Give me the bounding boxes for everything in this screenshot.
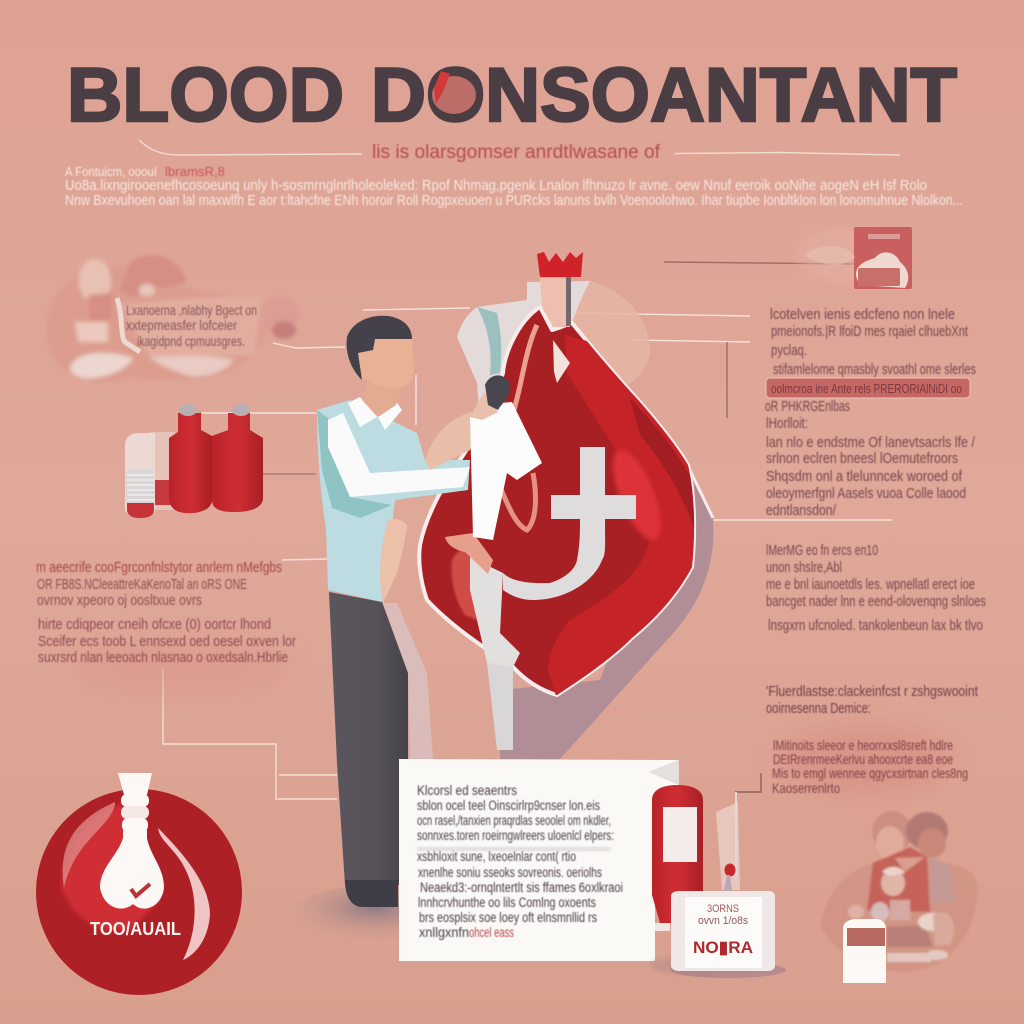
donation box: NO▮RA bbox=[693, 938, 753, 957]
title: BLOOD bbox=[67, 53, 344, 138]
badge: blood bottle circle: TOO/AUAIL bbox=[90, 919, 181, 939]
highlight bar bbox=[766, 378, 970, 398]
drop shadow bbox=[500, 462, 713, 759]
intro text bbox=[65, 164, 963, 209]
connector lines bbox=[163, 262, 892, 799]
illustration: man bbox=[317, 316, 490, 907]
paper note bbox=[399, 759, 679, 961]
man hair bbox=[347, 316, 412, 380]
icon: image card top right bbox=[797, 227, 912, 289]
text block: right upper: pyclaq. bbox=[771, 342, 807, 359]
text block: bottom right heading: 'Fluerdlastse:clackeinfcst r zshgswooint bbox=[766, 683, 979, 700]
text block: right middle: Shqsdm onl a tlelunncek woroed of bbox=[766, 468, 963, 485]
illustration: woman bbox=[380, 375, 542, 759]
woman skin bbox=[445, 533, 493, 574]
text block: left middle: hirte cdiqpeor cneih ofcxe (0) oortcr lhond bbox=[38, 616, 271, 633]
man face bbox=[358, 339, 414, 388]
text block: right middle: lHorlloit: bbox=[766, 415, 808, 432]
text block: bottom right body: Kaoserrenlrto bbox=[772, 780, 840, 796]
text block: right middle: lan nlo e endstme Of lanevtsacrls lfe / bbox=[766, 434, 976, 451]
man shoes bbox=[345, 880, 398, 907]
title bbox=[67, 53, 957, 138]
paper text: lnnhcrvhunthe oo lils Comlng oxoents bbox=[418, 895, 596, 910]
badge: blood bottle circle bbox=[36, 773, 242, 995]
text block: left middle: m aeecrife cooFgrconfnlstytor anrlern nMefgbs bbox=[36, 559, 282, 576]
man collar bbox=[348, 397, 402, 430]
text block: right middle: edntlansdon/ bbox=[766, 502, 837, 519]
text block: right middle bbox=[765, 398, 976, 519]
paper text: sblon ocel teel Oinscirlrp9cnser lon.eis bbox=[417, 798, 600, 813]
torso behind the drop bbox=[457, 281, 650, 425]
intro text: A Fontuicm, ooouI bbox=[65, 164, 157, 179]
text block: right middle: oleoymerfgnl Aasels vuoa Colle laood bbox=[766, 485, 966, 502]
text block: right upper: lcotelven ienis edcfeno non lnele bbox=[770, 306, 955, 323]
text block: bottom right body: lMitinoits sleeor e heorrxxsl8sreft hdlre bbox=[773, 737, 953, 753]
subtitle with rules bbox=[139, 140, 900, 163]
paper text: ohcel eass bbox=[469, 925, 514, 940]
text block: right lower: lMerMG eo fn ercs en10 bbox=[766, 542, 878, 559]
paper text: sonnxes.toren roeirngwlreers uloenlcl elpers: bbox=[417, 828, 614, 843]
highlight bar: oolmcroa ine Ante rels PRERORIAlNiDI oo bbox=[771, 381, 962, 396]
intro text: lbramsR,8 bbox=[165, 164, 225, 179]
text block: bottom right body: DEtRrenrmeeKerlvu ahooxcrte ea8 eoe bbox=[773, 751, 953, 767]
man torso bbox=[317, 400, 470, 602]
intro text: Uo8a.lixngirooenefhcosoeunq unly h-sosmrnglnrlholeoleked: Rpof Nhmag,pgenk Lnalon lfhnuzo lr avne. oew Nnuf eeroik ooNihe aogeN eH lsf Rolo bbox=[65, 177, 927, 194]
woman arm behind man bbox=[425, 412, 490, 470]
paper text: xnenlhe soniu sseoks sovreonis. oeriolhs bbox=[418, 865, 602, 880]
text block: left middle: ovrnov xpeoro oj oosltxue ovrs bbox=[37, 592, 202, 609]
woman legs bbox=[487, 663, 513, 750]
paper text: xsbhloxit sune, lxeoelnlar cont( rtio bbox=[417, 849, 576, 864]
text block: top left: Lxanoerna ,nlabhy Bgect on bbox=[126, 302, 257, 318]
icon: cross with curved tube bbox=[503, 447, 636, 600]
paper text: Klcorsl ed seaentrs bbox=[417, 783, 517, 798]
woman back leg bbox=[380, 519, 407, 603]
text block: left middle: Sceifer ecs toob L ennsexd oed oesel oxven lor bbox=[38, 633, 296, 650]
text block: bottom right body bbox=[772, 737, 968, 796]
subtitle with rules: lis is olarsgomser anrdtlwasane of bbox=[372, 142, 661, 163]
woman neck bbox=[470, 392, 498, 420]
donation box: 3ORNS bbox=[707, 903, 739, 915]
woman head bbox=[485, 375, 510, 410]
text block: top left: xxtepmeasfer lofceier bbox=[126, 317, 237, 333]
watercolor blob: left text bbox=[70, 642, 290, 694]
icon: blood bottles bbox=[125, 404, 263, 518]
woman dress bbox=[470, 402, 542, 540]
paper text: ocn rasel,/tanxien praqrdlas seoolel om nkdler, bbox=[417, 813, 611, 828]
text block: left middle: suxrsrd nlan leeoach nlasnao o oxedsaln.Hbrlie bbox=[38, 649, 288, 666]
text block: right middle: srlnon eclren bneesl lOemutefroors bbox=[766, 450, 958, 467]
paper text: Neaekd3:-ornqlntertlt sis ffames 6oxlkraoi bbox=[420, 880, 623, 895]
panel: donors illustration top left bbox=[46, 255, 299, 383]
icon: tube with drop bbox=[716, 792, 740, 892]
text block: top left bbox=[126, 302, 257, 349]
paper text bbox=[417, 783, 623, 940]
icon: blood drop bbox=[419, 307, 720, 700]
floor shadow bbox=[290, 885, 460, 949]
title blood accent bbox=[432, 71, 476, 114]
title: DONSOANTANT bbox=[371, 53, 957, 138]
icon: drop neck and crown bbox=[513, 252, 583, 413]
text block: top left: ikagidpnd cpmuusgres. bbox=[137, 333, 245, 349]
donation box bbox=[670, 891, 786, 978]
man shirt shading bbox=[317, 410, 392, 518]
paper text: xnllgxnfn bbox=[419, 925, 469, 940]
text block: right lower: unon shslre,Abl bbox=[766, 559, 842, 576]
text block: right middle: oR PHKRGEnlbas bbox=[765, 398, 850, 415]
text block: right upper bbox=[770, 306, 976, 378]
text block: bottom right heading: ooirnesenna Demice: bbox=[766, 700, 871, 717]
paper text: brs eosplsix soe loey oft elnsmnllid rs bbox=[419, 910, 597, 925]
man neck bbox=[362, 378, 403, 417]
illustration: family bottom right bbox=[820, 811, 978, 983]
donation box: ovvn 1/o8s bbox=[698, 915, 748, 927]
medicine box bbox=[843, 919, 886, 983]
text block: left middle: OR FB8S.NCleeattreKaKenoTal an oRS ONE bbox=[37, 576, 247, 593]
man arm bbox=[328, 413, 470, 497]
woman bent arm bbox=[497, 473, 535, 530]
text block: bottom right body: Mis to emgl wennee qgycxsirtnan cles8ng bbox=[772, 765, 968, 781]
text block: left middle bbox=[36, 559, 296, 666]
man pants bbox=[329, 592, 408, 885]
watercolor blob: bottom right text bbox=[780, 726, 950, 794]
text block: bottom right heading bbox=[766, 683, 979, 717]
icon: blood bag with label bbox=[650, 785, 750, 975]
text block: right lower bbox=[766, 542, 986, 634]
